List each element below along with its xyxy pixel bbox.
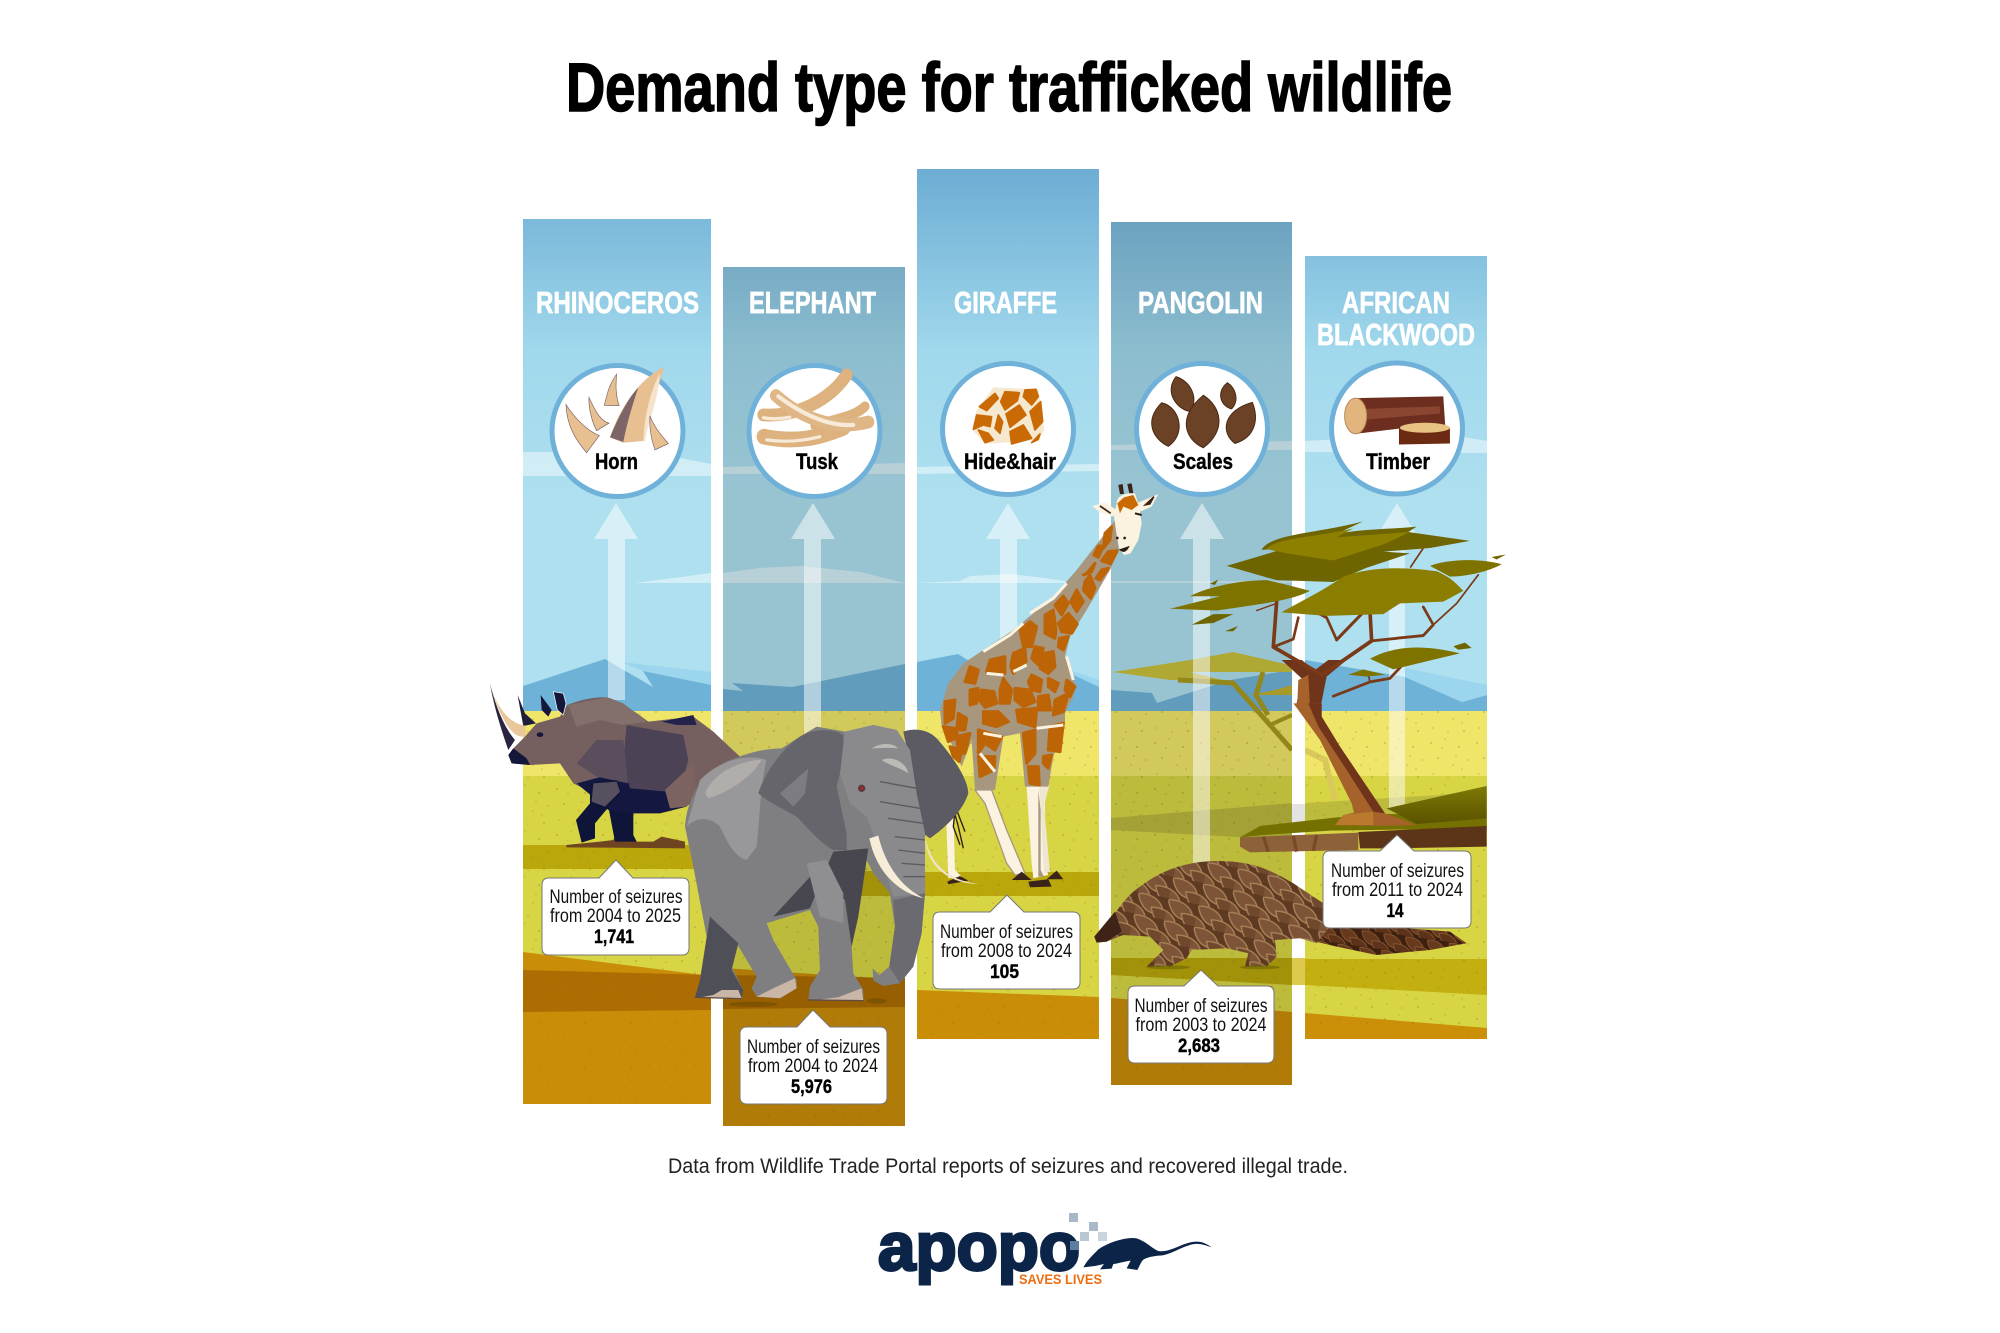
arrow: african blackwood	[1375, 503, 1419, 808]
callout: african blackwood seizures: from 2011 to 2024	[1332, 880, 1463, 901]
panel: african blackwood	[1305, 256, 1487, 1039]
caption: Data from Wildlife Trade Portal reports of seizures and recovered illegal trade.	[668, 1155, 1348, 1178]
logo: apopo saves lives: SAVES LIVES	[1019, 1271, 1102, 1287]
callout: pangolin seizures: 2,683	[1178, 1036, 1220, 1057]
band across gap	[1292, 958, 1305, 985]
callout: giraffe seizures: 105	[990, 962, 1019, 983]
icon: hide and hair	[942, 364, 1074, 494]
icon: tusk	[749, 366, 880, 496]
icon: horn: Horn	[595, 449, 638, 474]
icon: scales	[1136, 364, 1268, 494]
callout: elephant seizures	[740, 1010, 887, 1104]
icon: scales: Scales	[1173, 449, 1233, 474]
heading: elephant: ELEPHANT	[749, 285, 876, 320]
icon: hide and hair: Hide&hair	[964, 449, 1056, 474]
callout: rhinoceros seizures: from 2004 to 2025	[550, 906, 681, 927]
arrow: elephant	[791, 503, 835, 735]
callout: giraffe seizures	[933, 895, 1080, 989]
callout: giraffe seizures: from 2008 to 2024	[941, 941, 1072, 962]
heading: giraffe: GIRAFFE	[954, 285, 1057, 320]
callout: elephant seizures: Number of seizures	[747, 1037, 880, 1058]
illustration: pangolin	[1094, 861, 1467, 969]
title: Demand type for trafficked wildlife	[566, 49, 1452, 126]
logo: apopo saves lives: apopo	[878, 1209, 1080, 1285]
illustration: giraffe	[940, 483, 1158, 887]
icon: timber: Timber	[1366, 449, 1430, 474]
illustration: acacia tree	[1170, 521, 1506, 852]
icon: horn	[552, 366, 683, 496]
icon: timber	[1332, 363, 1462, 494]
panel: rhinoceros	[523, 219, 711, 1104]
callout: elephant seizures: 5,976	[791, 1077, 832, 1098]
callout: african blackwood seizures	[1323, 835, 1471, 928]
arrow: giraffe	[986, 503, 1030, 650]
panel: pangolin	[1111, 222, 1292, 1085]
panel: giraffe	[917, 169, 1099, 1039]
callout: rhinoceros seizures: Number of seizures	[550, 887, 682, 908]
heading: rhinoceros: RHINOCEROS	[536, 285, 699, 320]
callout: rhinoceros seizures	[542, 860, 689, 955]
callout: pangolin seizures: from 2003 to 2024	[1136, 1015, 1267, 1036]
arrow: pangolin	[1180, 503, 1224, 870]
arrow: rhinoceros	[594, 503, 638, 700]
callout: pangolin seizures	[1128, 970, 1274, 1063]
callout: african blackwood seizures: 14	[1386, 901, 1404, 922]
callout: elephant seizures: from 2004 to 2024	[748, 1056, 878, 1077]
panel: elephant	[723, 267, 905, 1126]
background acacia tree	[1113, 652, 1292, 750]
logo: apopo saves lives	[878, 1209, 1212, 1287]
callout: pangolin seizures: Number of seizures	[1134, 996, 1268, 1017]
illustration: rhinoceros	[490, 684, 740, 848]
heading: pangolin: PANGOLIN	[1138, 285, 1263, 320]
illustration: elephant	[685, 725, 978, 1007]
icon: tusk: Tusk	[796, 449, 839, 474]
heading: african blackwood: BLACKWOOD	[1317, 317, 1475, 352]
heading: african blackwood	[1317, 285, 1475, 352]
callout: giraffe seizures: Number of seizures	[940, 922, 1073, 943]
callout: african blackwood seizures: Number of seizures	[1331, 861, 1464, 882]
callout: rhinoceros seizures: 1,741	[594, 927, 634, 948]
heading: african blackwood: AFRICAN	[1342, 285, 1450, 320]
